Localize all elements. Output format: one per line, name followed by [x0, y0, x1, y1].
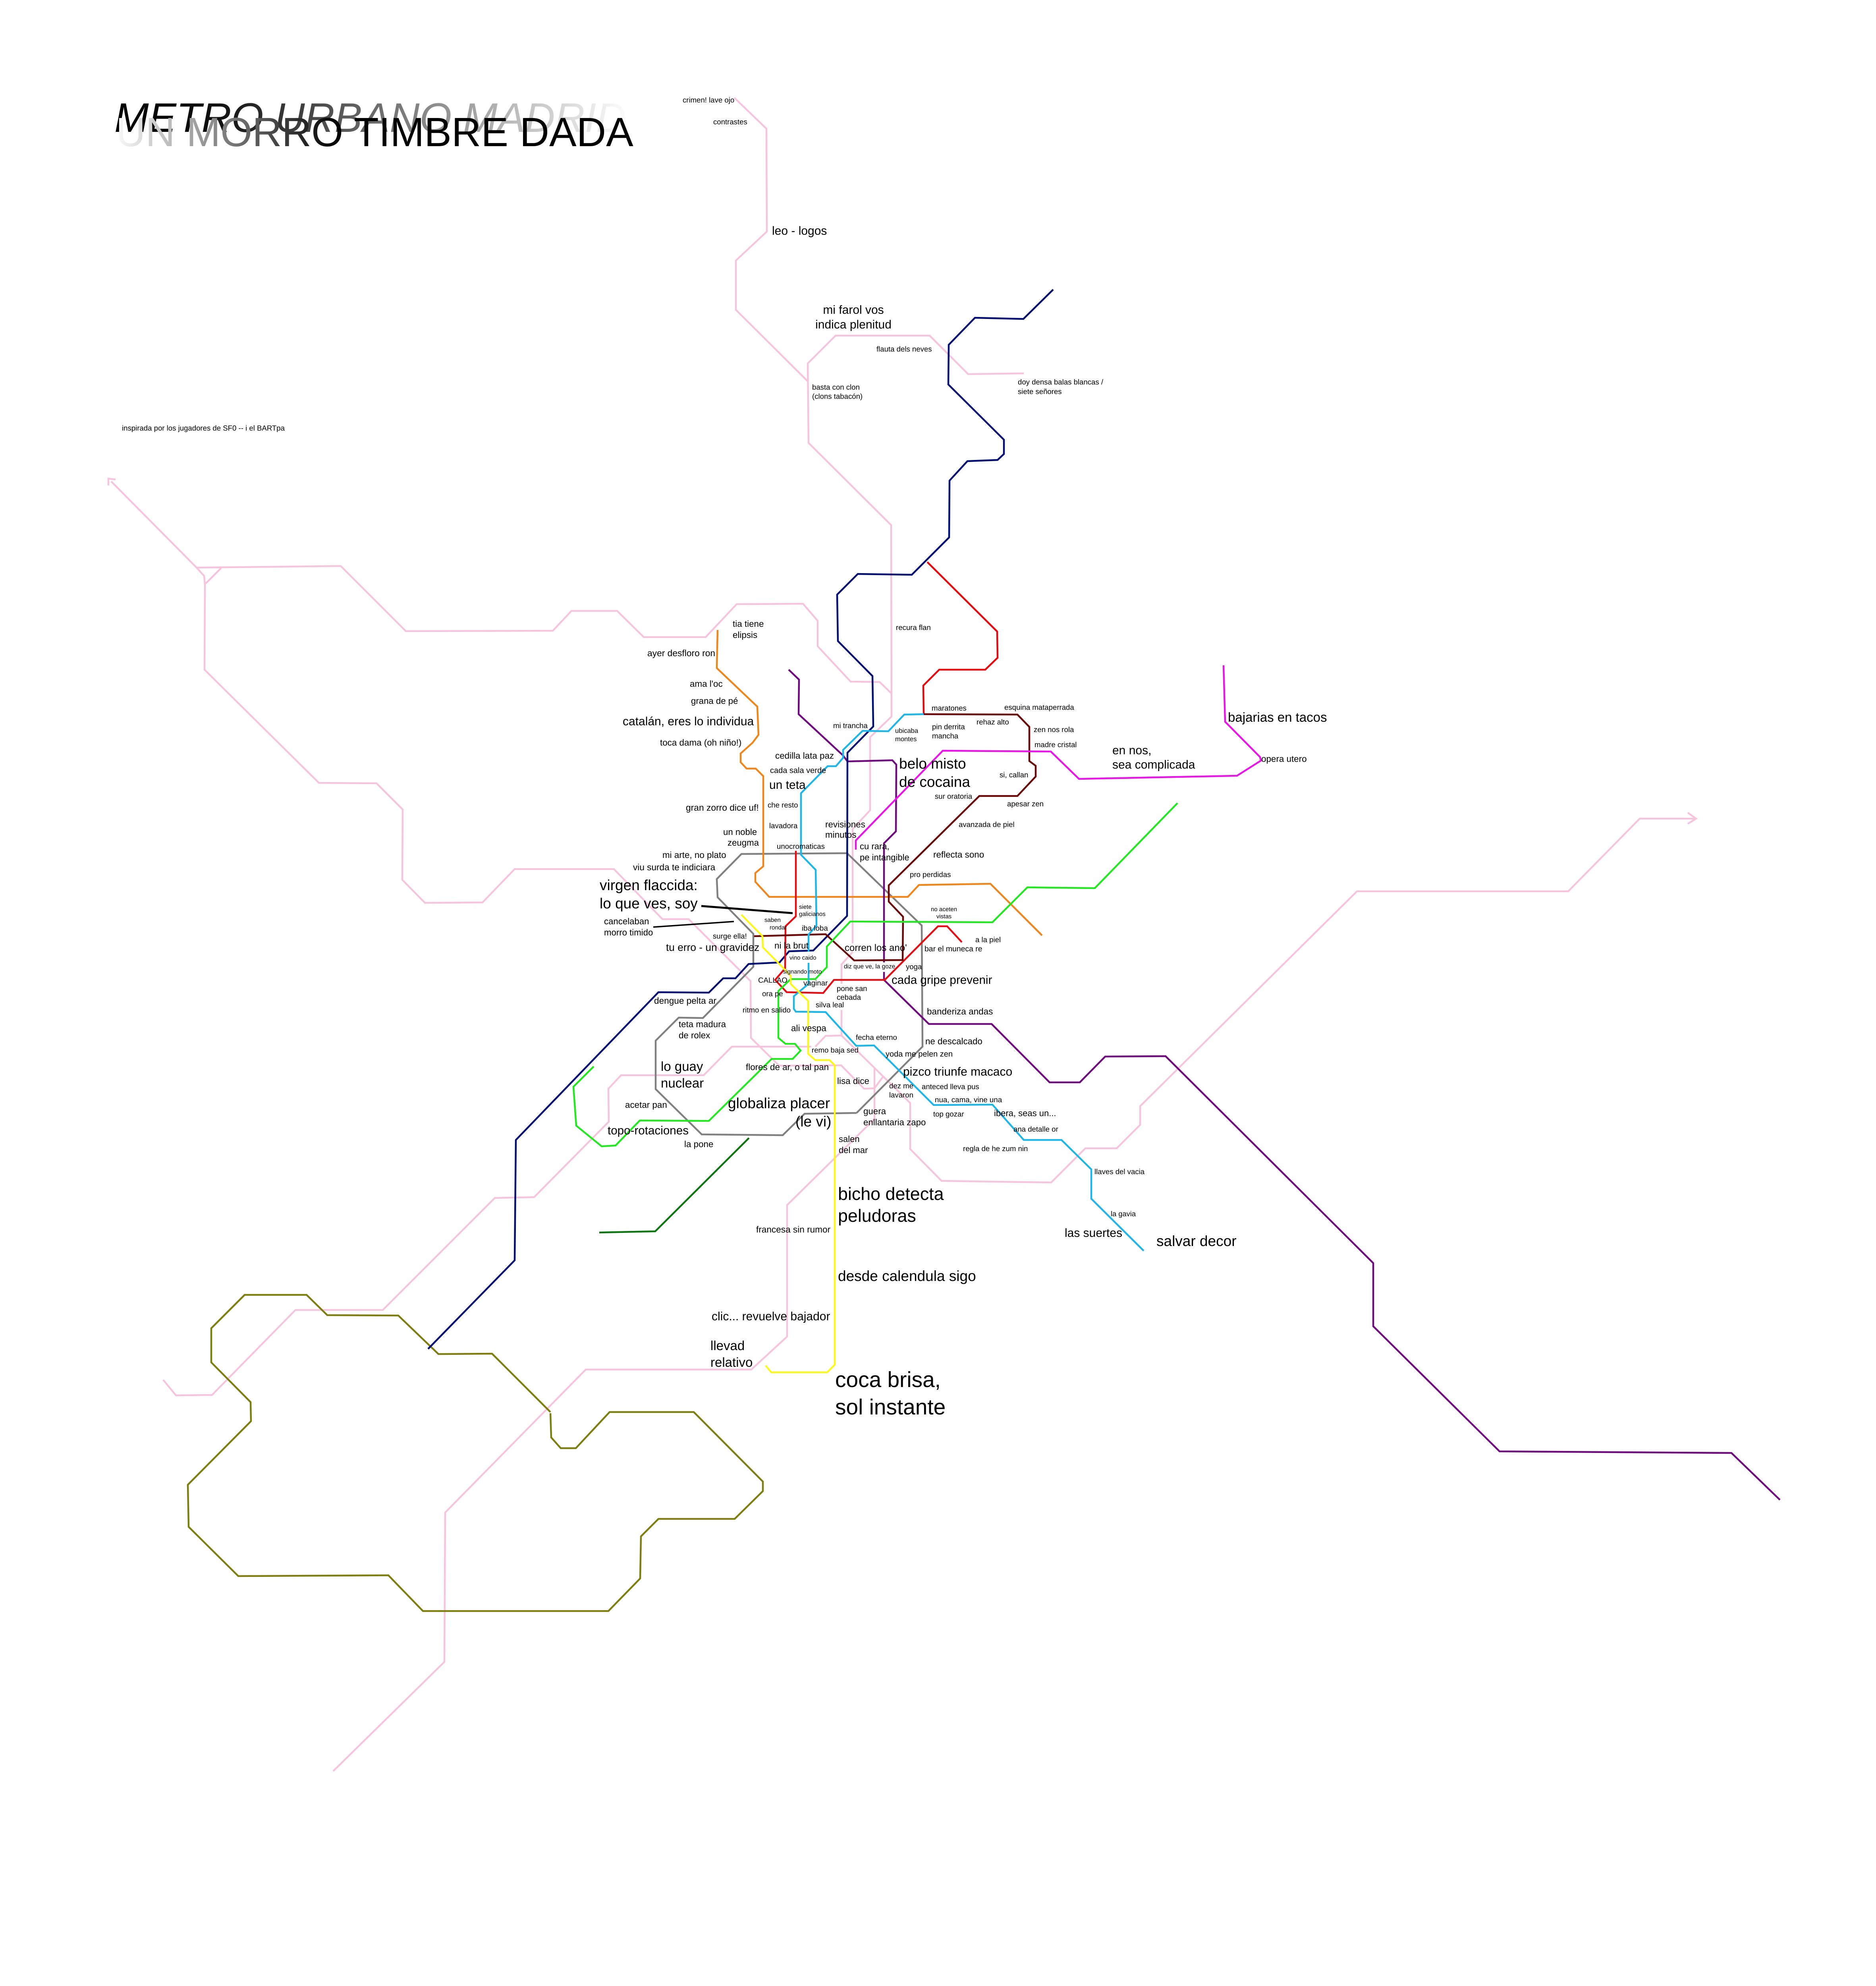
label: ubicaba montes: montes — [895, 735, 917, 743]
grey circular line — [656, 853, 923, 1135]
label: viu surda: viu surda te indiciara — [633, 862, 716, 872]
label: vaginar: vaginar — [803, 979, 828, 987]
pink line: small triangle link — [206, 568, 221, 583]
label: anteced lleva pus: anteced lleva pus — [922, 1082, 979, 1091]
label: grana de pé: grana de pé — [691, 696, 738, 706]
label: yoga: yoga — [906, 962, 922, 971]
label: no aceten vistas: vistas — [936, 913, 952, 920]
label: llevad relativo: relativo — [710, 1355, 753, 1370]
label: toca dama: toca dama (oh niño!) — [660, 738, 741, 748]
label: apesar zen: apesar zen — [1007, 800, 1044, 808]
label: la gavia: la gavia — [1111, 1209, 1136, 1218]
label: sur oratoria: sur oratoria — [935, 792, 973, 800]
label: tia tiene elipsis: tia tiene — [733, 619, 764, 629]
label: revisiones minutos: revisiones — [825, 819, 865, 829]
label: silva leal: silva leal — [816, 1001, 844, 1009]
label: lavadora: lavadora — [769, 821, 798, 830]
label: teta madura: de rolex — [679, 1030, 710, 1040]
label: tia tiene elipsis: elipsis — [733, 630, 757, 640]
label: gran zorro: gran zorro dice uf! — [686, 802, 759, 813]
label: dez me lavaron: lavaron — [889, 1091, 913, 1099]
pink line: main north-east route — [808, 336, 1695, 1182]
label: saben rondar: saben — [764, 917, 781, 923]
label: rehaz alto: rehaz alto — [977, 718, 1009, 726]
label: guera: guera — [863, 1106, 886, 1116]
label: reflecta sono: reflecta sono — [933, 850, 984, 860]
label: ubicaba montes: ubicaba — [895, 727, 919, 734]
label: belo misto: de cocaina — [899, 774, 970, 790]
label: doy densa balas: siete señores — [1018, 387, 1062, 396]
green line — [573, 803, 1177, 1146]
label: flores de ar: flores de ar, o tal pan — [746, 1062, 829, 1072]
label: saben rondar: rondar — [770, 924, 787, 931]
label: mi farol vos: mi farol vos — [823, 303, 884, 317]
label: ana detalle or: ana detalle or — [1013, 1125, 1058, 1133]
label: siete galicianos: siete — [799, 904, 812, 910]
label: callao: CALLAO — [758, 976, 787, 984]
label: ora pe: ora pe — [762, 989, 783, 998]
label: si callan: si, callan — [1000, 771, 1028, 779]
callout pointer: lo que ves — [701, 906, 793, 913]
label: guera: enllantaria zapo — [863, 1117, 926, 1127]
label: llaves del vacia: llaves del vacia — [1094, 1167, 1145, 1176]
label: salvar decor: salvar decor — [1156, 1233, 1237, 1249]
dark red line — [754, 714, 1036, 960]
label: unocromaticas: unocromaticas — [777, 842, 825, 850]
label: ibera: ibera, seas un... — [994, 1108, 1056, 1118]
label: doy densa balas: doy densa balas blancas / — [1018, 378, 1104, 386]
label: cedilla lata paz: cedilla lata paz — [775, 751, 834, 761]
label: virgen flaccida: virgen flaccida: — [600, 877, 698, 893]
label: avanzada de piel: avanzada de piel — [959, 820, 1015, 829]
label: crimen lave ojo: crimen! lave ojo — [683, 96, 734, 104]
arrow: pink east end — [1688, 813, 1696, 824]
label: nua cama: nua, cama, vine una — [935, 1095, 1002, 1104]
label: a la piel: a la piel — [975, 935, 1001, 944]
label: banderiza andas: banderiza andas — [927, 1007, 993, 1016]
label: cu rara: cu rara, — [860, 841, 890, 851]
label: fecha eterno: fecha eterno — [856, 1033, 897, 1041]
label: llevad relativo: llevad — [710, 1338, 745, 1353]
label: mi trancha: mi trancha — [833, 721, 868, 730]
label: pin derrita mancha: pin derrita — [932, 723, 965, 731]
label: ama l'oc: ama l'oc — [690, 679, 723, 689]
label: desde calendula sigo: desde calendula sigo — [838, 1268, 976, 1284]
label: cada gripe prevenir: cada gripe prevenir — [892, 974, 992, 987]
label: ali vespa: ali vespa — [791, 1023, 826, 1033]
label: esquina mataperrada: esquina mataperrada — [1004, 703, 1074, 711]
label: surge ella: surge ella! — [713, 932, 747, 940]
label: teta madura: teta madura — [679, 1019, 726, 1029]
label: leo logos: leo - logos — [772, 224, 827, 238]
arrow: pink west end — [108, 479, 116, 485]
label: mi farol vos: indica plenitud — [815, 318, 892, 331]
label: bajarias en tacos: bajarias en tacos — [1228, 710, 1327, 724]
orange line — [717, 630, 1042, 935]
label: en nos sea complicada: sea complicada — [1112, 758, 1195, 771]
label: en nos sea complicada: en nos, — [1112, 744, 1151, 757]
label: salen del mar: del mar — [839, 1145, 868, 1155]
pink line: south route — [333, 1068, 874, 1771]
label: vino caido: vino caido — [789, 954, 816, 961]
red line: north — [923, 562, 998, 714]
pink line: west route — [197, 568, 883, 1089]
cyan line — [794, 714, 1144, 1251]
label: dengue pelta ar: dengue pelta ar — [654, 996, 717, 1006]
label: catalán: catalán, eres lo individua — [623, 715, 754, 728]
label: signando moto: signando moto — [783, 969, 822, 975]
label: topo-rotaciones: topo-rotaciones — [608, 1124, 689, 1137]
label: basta con clon: (clons tabacón) — [812, 392, 863, 400]
magenta line — [856, 665, 1261, 850]
label: regla de he zum nin: regla de he zum nin — [963, 1144, 1028, 1153]
label: dez me lavaron: dez me — [889, 1082, 913, 1090]
label: las suertes: las suertes — [1065, 1227, 1122, 1240]
label: pin derrita mancha: mancha — [932, 732, 959, 740]
label: un noble zeugma: un noble — [723, 827, 757, 837]
label: lo guay nuclear: lo guay — [661, 1059, 703, 1074]
label: un noble zeugma: zeugma — [728, 838, 759, 848]
label: basta con clon: basta con clon — [812, 383, 860, 391]
label: yoda me pelen zen: yoda me pelen zen — [886, 1050, 953, 1059]
label: iba loba: iba loba — [802, 924, 828, 932]
label: lo guay nuclear: nuclear — [661, 1076, 704, 1090]
label: la pone: la pone — [684, 1139, 713, 1149]
title: metro urbano madrid: METRO URBANO MADRID — [114, 95, 626, 141]
title: un morro timbre dada: UN MORRO TIMBRE DADA — [116, 109, 633, 155]
label: ayer desfloro ron: ayer desfloro ron — [647, 648, 715, 658]
station labels — [600, 96, 1327, 1419]
label: pone san cebada: cebada — [837, 993, 861, 1001]
label: salen del mar: salen — [839, 1134, 860, 1144]
label: virgen flaccida: lo que ves, soy — [600, 895, 698, 912]
label: maratones: maratones — [932, 704, 967, 712]
label: recura flan: recura flan — [896, 623, 931, 632]
dark green line — [599, 1138, 749, 1233]
label: lisa dice: lisa dice — [837, 1076, 869, 1086]
label: tu erro: tu erro - un gravidez — [666, 941, 759, 953]
label: bicho detecta: bicho detecta — [838, 1184, 944, 1204]
label: cancelaban: cancelaban — [604, 916, 649, 926]
label: revisiones minutos: minutos — [825, 830, 856, 840]
label: opera utero: opera utero — [1261, 754, 1307, 764]
label: diz que ve: diz que ve, la goze — [844, 963, 895, 970]
label: cancelaban: morro timido — [604, 927, 653, 937]
label: flauta dels neves: flauta dels neves — [876, 345, 932, 353]
label: zen nos rola: zen nos rola — [1034, 725, 1074, 734]
label: coca brisa: coca brisa, — [835, 1367, 941, 1392]
label: ne descalcado: ne descalcado — [925, 1036, 982, 1046]
label: un teta: un teta — [769, 779, 806, 792]
label: madre cristal: madre cristal — [1035, 740, 1077, 749]
pink line: south-west route — [163, 1036, 841, 1395]
callout pointer: morro timido — [653, 922, 734, 927]
label: bicho detecta: peludoras — [838, 1206, 916, 1226]
label: belo misto: belo misto — [899, 755, 966, 772]
label: francesa sin rumor: francesa sin rumor — [756, 1225, 831, 1234]
label: coca brisa: sol instante — [835, 1395, 946, 1419]
label: acetar pan: acetar pan — [625, 1100, 667, 1110]
label: remo baja sed: remo baja sed — [812, 1046, 859, 1054]
label: top gozar: top gozar — [933, 1110, 964, 1118]
label: mi arte: mi arte, no plato — [662, 850, 726, 860]
label: pone san cebada: pone san — [837, 984, 867, 993]
yellow line — [741, 915, 835, 1372]
label: pro perdidas: pro perdidas — [910, 870, 951, 879]
label: globaliza placer: (le vi) — [795, 1113, 831, 1130]
label: cada sala verde: cada sala verde — [770, 766, 826, 775]
label: contrastes: contrastes — [713, 118, 747, 126]
label: siete galicianos: galicianos — [799, 911, 826, 918]
label: ritmo en salido: ritmo en salido — [743, 1006, 791, 1014]
pink line: north branch — [734, 98, 808, 381]
pink line: north-west route — [111, 481, 892, 694]
red line: centre — [775, 851, 962, 993]
label: bar el muneca re: bar el muneca re — [924, 945, 982, 953]
label: ni la brut: ni la brut — [774, 941, 809, 950]
navy line — [428, 290, 1053, 1349]
label: no aceten vistas: no aceten — [931, 906, 957, 913]
label: corren los ano: corren los ano' — [845, 943, 907, 953]
label: che resto: che resto — [768, 801, 798, 809]
label: clic revuelve bajador: clic... revuelve bajador — [712, 1310, 830, 1323]
olive line — [188, 1295, 763, 1611]
credit text: inspirada por los jugadores de SF0 -- i el BARTpa — [122, 424, 285, 432]
purple line — [789, 670, 1780, 1500]
label: cu rara: pe intangible — [860, 852, 909, 862]
label: pizco triunfe macaco: pizco triunfe macaco — [903, 1065, 1012, 1078]
label: globaliza placer: globaliza placer — [728, 1095, 830, 1111]
